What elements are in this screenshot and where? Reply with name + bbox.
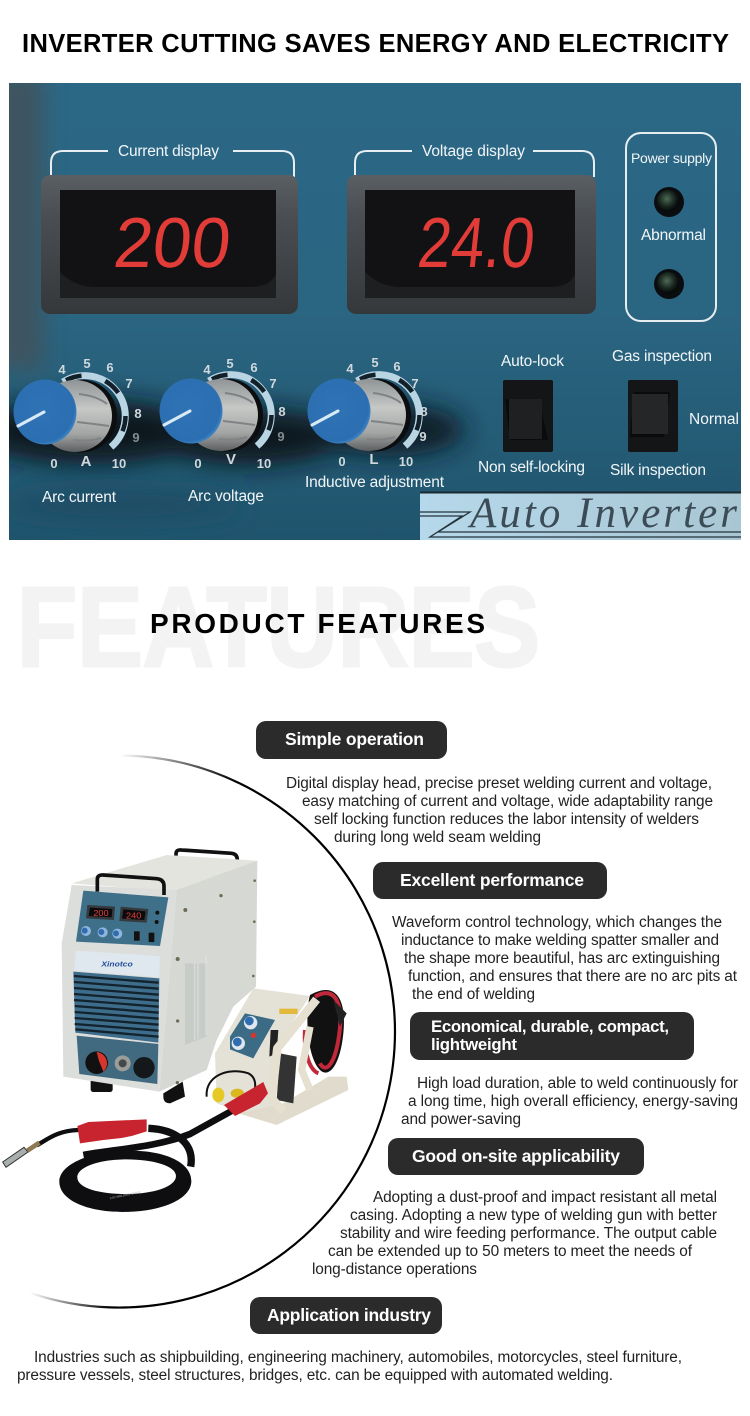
text: excellent performance: function, and ensures that there are no arc pits at <box>408 968 738 985</box>
knob: inductive adjustment: 6 <box>393 359 401 374</box>
knob: arc voltage: 7 <box>269 376 277 391</box>
current display: Current display <box>118 143 219 160</box>
text: application industry: Industries such as shipbuilding, engineering machinery, automobiles, motorcycles, steel furniture, <box>34 1349 682 1366</box>
knob: arc current: A <box>81 453 92 470</box>
machine front: 240 <box>126 910 142 920</box>
text: good on-site applicability: Adopting a dust-proof and impact resistant all metal <box>373 1189 717 1206</box>
text: simple operation: Digital display head, precise preset welding current and voltage, <box>286 775 712 792</box>
current display: 200 <box>110 204 235 283</box>
knob: arc voltage: 4 <box>203 362 211 377</box>
pill: application industry: Application industry <box>267 1305 431 1325</box>
text: economical, durable <box>401 1075 738 1128</box>
knob: arc voltage <box>160 356 286 505</box>
knob: arc voltage: 6 <box>250 360 258 375</box>
knob: inductive adjustment <box>305 355 445 491</box>
section heading: PRODUCT FEATURES <box>150 608 485 639</box>
panel: control panel photo <box>0 70 741 540</box>
knob: arc voltage: 10 <box>257 456 271 471</box>
switch: gas and silk inspection: Gas inspection <box>612 348 712 365</box>
indicator box: power supply and abnormal: Power supply <box>631 150 712 166</box>
knob: arc current: 0 <box>50 456 58 471</box>
text: simple operation: during long weld seam welding <box>334 829 541 846</box>
knob: arc current: 7 <box>125 376 133 391</box>
machine front: Xinotco <box>100 962 134 969</box>
knob: arc voltage: 8 <box>278 404 286 419</box>
text: excellent performance: the shape more beautiful, has arc extinguishing <box>404 950 720 967</box>
text: simple operation <box>286 775 713 846</box>
machine front: 200 <box>93 908 109 918</box>
voltage display: Voltage display <box>422 143 525 160</box>
pill: application industry <box>250 1297 442 1334</box>
indicator box: power supply and abnormal <box>626 133 716 321</box>
switch: auto-lock: Auto-lock <box>501 353 564 370</box>
product: welding gun and cable: CO2 WELDING CABLE <box>109 1190 141 1200</box>
knob: arc current: 4 <box>58 362 66 377</box>
text: economical, durable: a long time, high overall efficiency, energy-saving <box>408 1093 738 1110</box>
pill: economical, durable: Economical, durable, compact, <box>431 1017 669 1036</box>
switch: auto-lock <box>478 353 585 476</box>
title: INVERTER CUTTING SAVES ENERGY AND ELECTRICITY <box>22 30 729 58</box>
text: economical, durable: and power-saving <box>401 1111 521 1128</box>
pill: simple operation <box>256 721 447 759</box>
text: excellent performance: inductance to make welding spatter smaller and <box>401 932 719 949</box>
knob: arc current: 10 <box>112 456 126 471</box>
knob: inductive adjustment: L <box>369 451 379 468</box>
knob: inductive adjustment: 8 <box>420 404 428 419</box>
product: welding gun and cable <box>3 1082 268 1212</box>
decorative arc around product <box>30 756 395 1308</box>
switch: gas and silk inspection: Silk inspection <box>610 462 706 479</box>
pill: economical, durable: lightweight <box>431 1035 517 1054</box>
current display <box>41 143 298 314</box>
text: good on-site applicability: stability and wire feeding performance. The output cable <box>340 1225 717 1242</box>
pill: excellent performance: Excellent performance <box>400 870 584 890</box>
knob: arc current: 9 <box>132 430 140 445</box>
product: welding machine <box>62 850 348 1125</box>
voltage display: 24.0 <box>414 204 539 283</box>
machine front <box>62 875 177 1092</box>
text: simple operation: self locking function reduces the labor intensity of welders <box>314 811 699 828</box>
knob: inductive adjustment: Inductive adjustment <box>305 474 445 491</box>
pill: economical, durable <box>410 1012 694 1060</box>
text: good on-site applicability: long-distance operations <box>312 1261 477 1278</box>
knob: arc current: 8 <box>134 406 142 421</box>
knob: arc current: Arc current <box>42 489 117 506</box>
knob: arc voltage: Arc voltage <box>188 488 264 505</box>
knob: arc voltage: 0 <box>194 456 202 471</box>
switch: gas and silk inspection: Normal <box>689 411 739 428</box>
text: excellent performance <box>392 914 738 1003</box>
text: good on-site applicability: can be extended up to 50 meters to meet the needs of <box>328 1243 693 1260</box>
text: good on-site applicability <box>312 1189 717 1278</box>
knob: inductive adjustment: 5 <box>371 355 379 370</box>
text: economical, durable: High load duration, able to weld continuously for <box>417 1075 738 1092</box>
knob: arc current: 6 <box>106 360 114 375</box>
text: application industry: pressure vessels, steel structures, bridges, etc. can be equipped with automated welding. <box>17 1367 613 1384</box>
knob: arc voltage: 9 <box>277 429 285 444</box>
machine top and side <box>72 850 257 1092</box>
knob: arc current: 5 <box>83 356 91 371</box>
pill: simple operation: Simple operation <box>285 729 424 749</box>
knob: inductive adjustment: 7 <box>411 376 419 391</box>
switch: gas and silk inspection <box>610 348 739 479</box>
pill: good on-site applicability <box>388 1138 644 1175</box>
knob: inductive adjustment: 9 <box>419 429 427 444</box>
machine feet <box>91 1073 185 1103</box>
knob: inductive adjustment: 4 <box>346 361 354 376</box>
knob: arc current <box>14 356 142 506</box>
text: excellent performance: Waveform control technology, which changes the <box>392 914 722 931</box>
background word: features: FEATURES <box>17 564 540 690</box>
pill: good on-site applicability: Good on-site applicability <box>412 1146 620 1166</box>
knob: arc voltage: V <box>226 451 236 468</box>
wire feeder <box>207 988 348 1125</box>
text: application industry <box>17 1349 682 1384</box>
knob: arc voltage: 5 <box>226 356 234 371</box>
text: excellent performance: the end of welding <box>412 986 535 1003</box>
text: good on-site applicability: casing. Adopting a new type of welding gun with better <box>350 1207 717 1224</box>
knob: inductive adjustment: 10 <box>399 454 413 469</box>
pill: excellent performance <box>373 862 607 899</box>
knob: inductive adjustment: 0 <box>338 454 346 469</box>
text: simple operation: easy matching of current and voltage, wide adaptability range <box>302 793 713 810</box>
voltage display <box>347 143 596 314</box>
label plate: auto inverter: Auto Inverter <box>467 490 737 537</box>
switch: auto-lock: Non self-locking <box>478 459 585 476</box>
indicator box: power supply and abnormal: Abnormal <box>641 227 706 244</box>
